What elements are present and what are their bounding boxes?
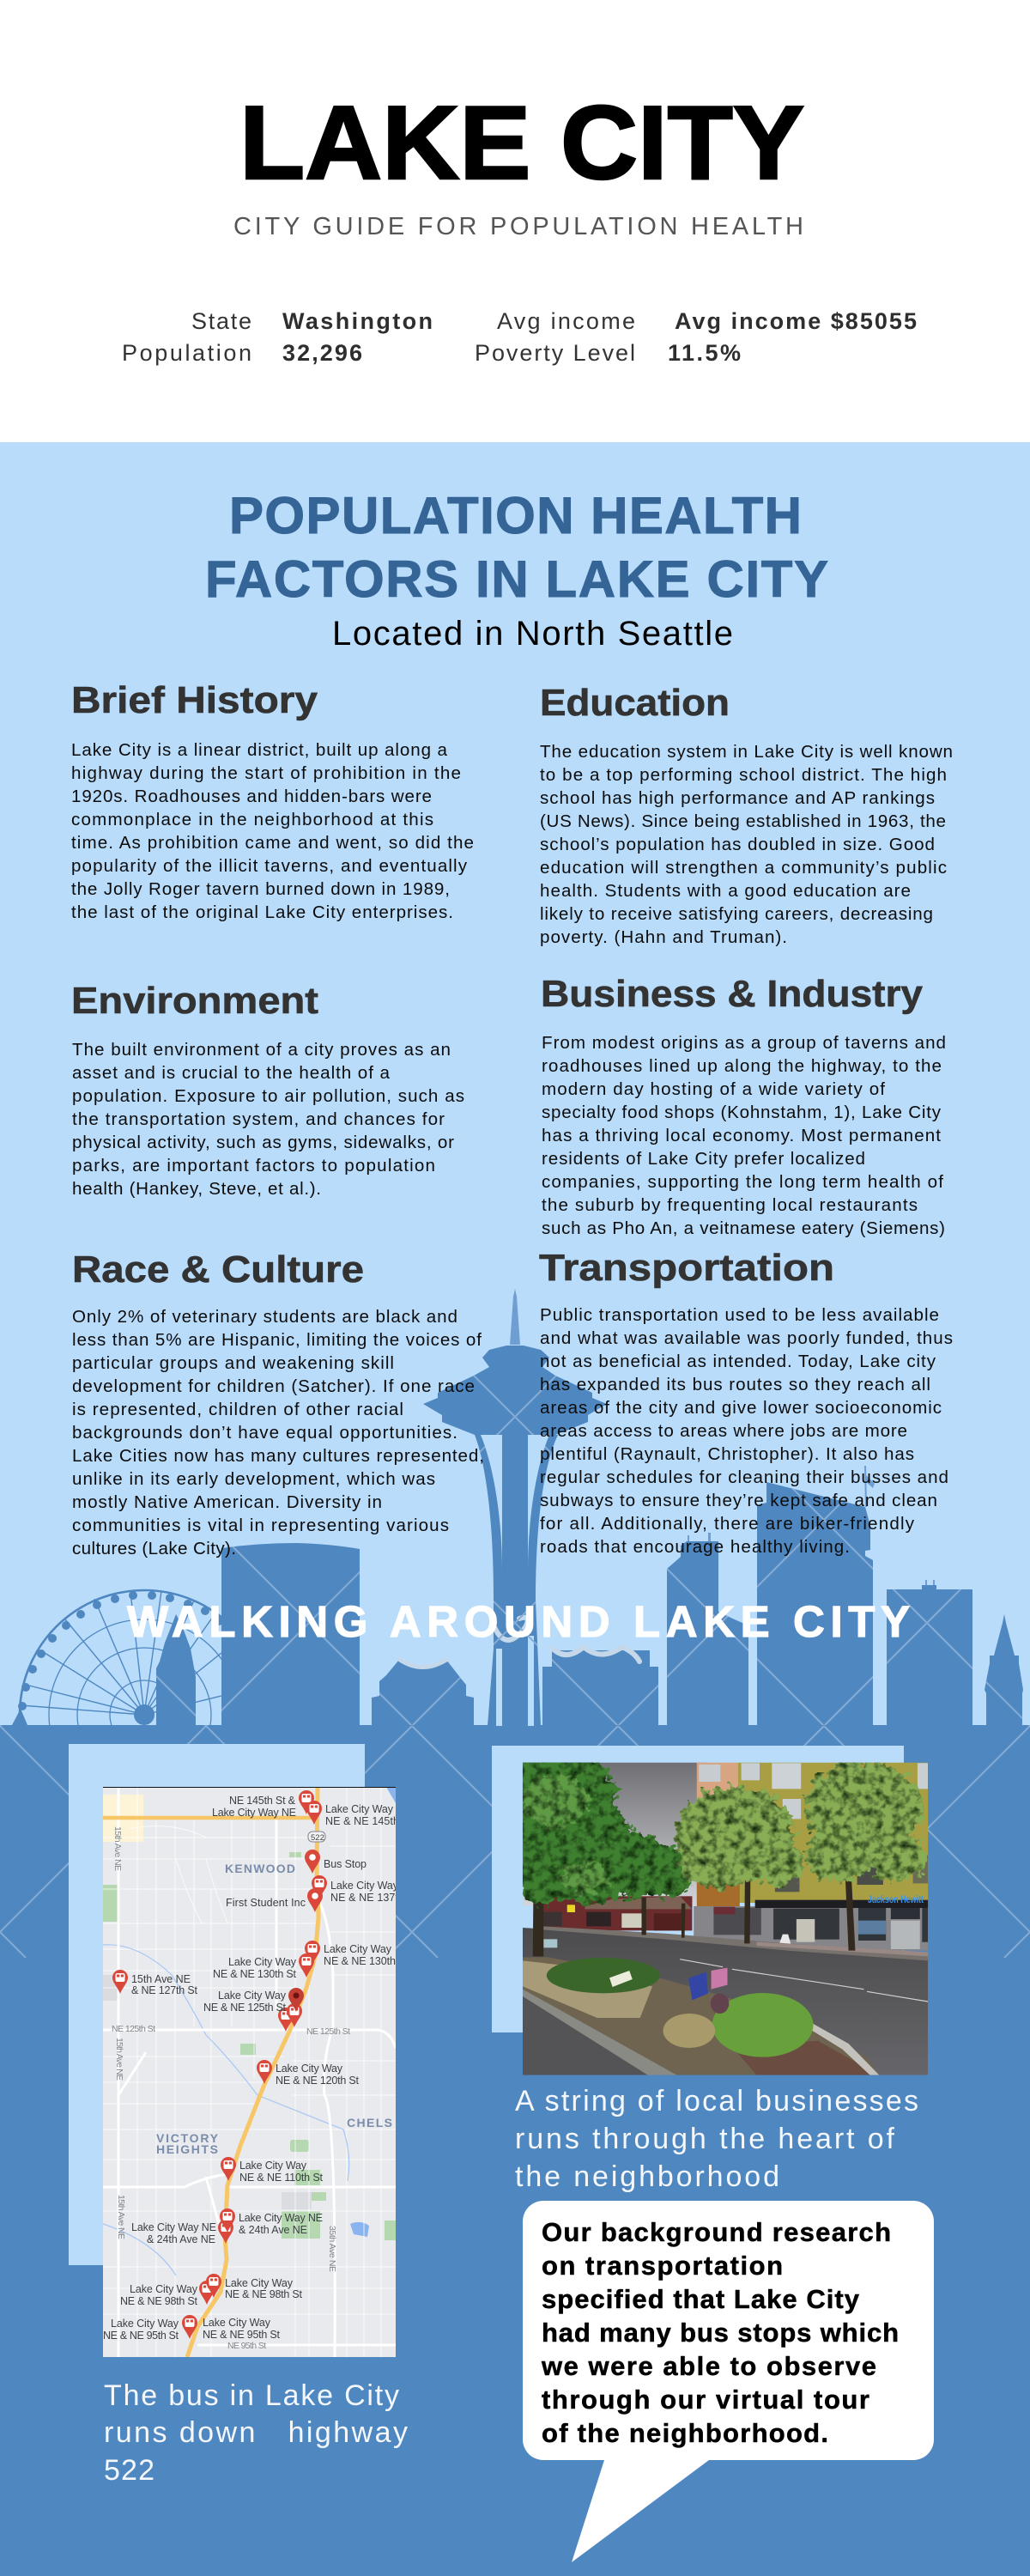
subtitle: CITY GUIDE FOR POPULATION HEALTH xyxy=(233,213,803,240)
bubble text: specified that Lake City xyxy=(542,2284,860,2314)
map grid streets xyxy=(103,1787,396,2357)
city statistics: State xyxy=(191,308,251,334)
caption: local businesses: A string of local businesses xyxy=(515,2085,918,2117)
block: environment: asset and is crucial to the health of a xyxy=(72,1063,391,1083)
tree foliage xyxy=(522,1762,928,1909)
block: brief history: Lake City is a linear district, built up along a xyxy=(71,740,448,760)
bus stop labels: NE & NE 130th St xyxy=(213,1968,297,1980)
diagonal lattice pattern xyxy=(0,1376,1030,1958)
light backing panel: photo xyxy=(492,1746,904,2032)
block: environment: Environment xyxy=(71,980,318,1022)
map street labels: NE 95th St xyxy=(227,2341,266,2351)
route shield: 522 xyxy=(311,1833,324,1843)
block: transportation: and what was available was poorly funded, thus xyxy=(540,1328,953,1348)
block: race and culture: mostly Native American. Diversity in xyxy=(72,1492,382,1512)
bus stop labels: Lake City Way xyxy=(218,1990,287,2002)
bus stop labels: NE 145th St & xyxy=(229,1795,296,1807)
block: brief history: popularity of the illicit taverns, and eventually xyxy=(71,856,468,876)
block: education: education will strengthen a community’s public xyxy=(540,858,947,878)
bubble text: Our background research xyxy=(542,2217,891,2247)
bus stop labels: NE & NE 98th St xyxy=(225,2288,303,2300)
section heading: POPULATION HEALTH xyxy=(229,487,802,544)
block: transportation: roads that encourage healthy living. xyxy=(540,1537,850,1557)
city statistics xyxy=(122,308,917,366)
block: environment xyxy=(71,980,464,1199)
map street labels: NE 125th St xyxy=(112,2024,155,2034)
block: transportation: regular schedules for cleaning their busses and xyxy=(540,1467,948,1487)
apartment building xyxy=(697,1763,928,1906)
bus stop labels: Lake City Way xyxy=(130,2283,198,2295)
caption: bus map: The bus in Lake City xyxy=(104,2379,399,2412)
bubble text: on transportation xyxy=(542,2251,783,2281)
block: transportation: subways to ensure they’re kept safe and clean xyxy=(540,1491,937,1510)
route shield xyxy=(308,1832,325,1843)
block: brief history: the Jolly Roger tavern burned down in 1989, xyxy=(71,879,450,899)
bus stop labels: Lake City Way xyxy=(325,1803,394,1815)
block: business and industry: companies, supporting the long term health of xyxy=(542,1172,943,1192)
map street labels: 15th Ave NE xyxy=(114,2038,124,2081)
block: business and industry: has a thriving local economy. Most permanent xyxy=(542,1126,941,1145)
map street labels: NE 125th St xyxy=(306,2026,350,2037)
block: transportation: Public transportation used to be less available xyxy=(540,1305,939,1325)
map neighborhood labels: VICTORY xyxy=(156,2131,219,2145)
block: education: school’s population has doubled in size. Good xyxy=(540,835,935,854)
block: race and culture: Only 2% of veterinary students are black and xyxy=(72,1307,457,1327)
block: race and culture: cultures (Lake City). xyxy=(72,1539,236,1558)
city statistics: Washington xyxy=(282,308,433,334)
map neighborhood labels xyxy=(156,1862,392,2156)
caption: local businesses xyxy=(515,2085,918,2193)
bus stop labels: NE & NE 130th xyxy=(324,1955,396,1967)
block: education: likely to receive satisfying careers, decreasing xyxy=(540,904,933,924)
light blue panel background xyxy=(0,442,1030,1730)
caption: local businesses: the neighborhood xyxy=(515,2160,779,2193)
curb xyxy=(523,1990,677,2075)
sky xyxy=(523,1763,706,1905)
map top edge xyxy=(103,1787,396,1788)
lower left road xyxy=(523,1996,648,2075)
bus stop labels: NE & NE 137th xyxy=(330,1892,404,1904)
block: race and culture: less than 5% are Hispanic, limiting the voices of xyxy=(72,1330,482,1350)
block: race and culture: development for children (Satcher). If one race xyxy=(72,1376,475,1396)
bus stop labels: & 24th Ave NE xyxy=(147,2233,215,2245)
block: brief history: Brief History xyxy=(71,679,318,721)
bus stop labels: Lake City Way xyxy=(225,2277,294,2289)
map neighborhood labels: HEIGHTS xyxy=(156,2142,218,2156)
section heading xyxy=(205,487,828,608)
block: environment: The built environment of a city proves as an xyxy=(72,1040,451,1060)
rooftop details xyxy=(688,1466,935,1585)
bubble text: we were able to observe xyxy=(541,2351,876,2381)
bus stop labels: 15th Ave NE xyxy=(131,1973,191,1985)
bus stop labels: Lake City Way NE xyxy=(131,2221,216,2233)
bus stop labels: Lake City Way xyxy=(203,2317,271,2329)
block: transportation: plentiful (Raynault, Christopher). It also has xyxy=(540,1444,914,1464)
block: education: poverty. (Hahn and Truman). xyxy=(540,927,787,947)
shrub and grass xyxy=(547,1958,813,2057)
median xyxy=(523,1957,879,2075)
block: brief history: time. As prohibition came and went, so did the xyxy=(71,833,474,853)
seattle skyline silhouette xyxy=(0,1288,1030,1958)
block: race and culture: Lake Cities now has many cultures represented, xyxy=(72,1446,484,1466)
bus stop labels: NE & NE 98th St xyxy=(120,2295,198,2307)
bus stop labels: NE & NE 95th St xyxy=(103,2330,179,2342)
block: race and culture: communities is vital in representing various xyxy=(72,1516,449,1535)
bus stop labels: Lake City Way NE xyxy=(239,2212,323,2224)
caption: bus map: 522 xyxy=(104,2454,154,2487)
bus route map xyxy=(103,1786,404,2357)
street view photo of lake city way xyxy=(498,1750,928,2075)
bus stop labels: NE & NE 110th St xyxy=(239,2172,324,2184)
block: business and industry: residents of Lake City prefer localized xyxy=(542,1149,865,1169)
map base xyxy=(103,1787,396,2357)
road xyxy=(523,1928,928,2075)
bus stop labels: Lake City Way NE xyxy=(212,1807,296,1819)
bus stop pins xyxy=(112,1790,327,2339)
map street labels xyxy=(112,1826,350,2351)
block: business and industry: modern day hosting of a wide variety of xyxy=(542,1079,885,1099)
block: education: health. Students with a good education are xyxy=(540,881,911,901)
bus stop labels: Lake City Way xyxy=(228,1956,297,1968)
map street labels: 35th Ave NE xyxy=(327,2226,337,2272)
bubble text xyxy=(541,2217,899,2448)
block: race and culture: unlike in its early development, which was xyxy=(72,1469,435,1489)
block: environment: health (Hankey, Steve, et al.). xyxy=(72,1179,321,1199)
ferris wheel gondolas xyxy=(18,1591,223,1725)
sidewalk xyxy=(542,1926,928,1960)
city statistics: Avg income xyxy=(497,308,635,334)
block: transportation: has expanded its bus routes so they reach all xyxy=(540,1375,930,1394)
block: environment: population. Exposure to air pollution, such as xyxy=(72,1086,464,1106)
bus stop labels: & NE 127th St xyxy=(131,1984,198,1996)
space needle base light strips xyxy=(496,1636,534,1726)
block: environment: physical activity, such as gyms, sidewalks, or xyxy=(72,1133,454,1152)
bus stop labels: Lake City Way xyxy=(239,2160,307,2172)
light backing panel: map xyxy=(69,1744,365,2265)
city statistics: Population xyxy=(122,340,251,366)
block: brief history xyxy=(71,679,474,922)
bubble text: of the neighborhood. xyxy=(542,2418,828,2448)
map street labels: 15th Ave NE xyxy=(112,1826,123,1871)
city statistics: 32,296 xyxy=(282,340,362,366)
page background white xyxy=(0,0,1030,442)
major streets xyxy=(103,1787,396,2357)
block: business and industry: roadhouses lined up along the highway, to the xyxy=(542,1056,942,1076)
bus stop labels: Bus Stop xyxy=(324,1858,367,1870)
highway 522 xyxy=(103,1787,318,2357)
block: business and industry xyxy=(541,973,946,1238)
bus stop labels: NE & NE 95th St xyxy=(203,2329,281,2341)
block: education: school has high performance and AP rankings xyxy=(540,788,935,808)
title: LAKE CITY xyxy=(239,84,804,201)
city statistics: 11.5% xyxy=(668,340,741,366)
map neighborhood labels: CHELS xyxy=(347,2116,392,2129)
buildings and space needle xyxy=(156,1346,1023,1726)
ferris wheel cover below ground xyxy=(0,1725,360,1742)
bus stop labels: & 24th Ave NE xyxy=(239,2224,307,2236)
block: brief history: the last of the original Lake City enterprises. xyxy=(71,902,453,922)
storefronts xyxy=(694,1900,928,1951)
bus stop labels: NE & NE 125th St xyxy=(203,2002,287,2014)
bubble text: through our virtual tour xyxy=(542,2385,869,2415)
block: business and industry: Business & Industry xyxy=(541,973,924,1015)
map neighborhood labels: KENWOOD xyxy=(225,1862,295,1875)
block: brief history: highway during the start of prohibition in the xyxy=(71,763,461,783)
block: transportation xyxy=(539,1247,953,1557)
block: education: to be a top performing school district. The high xyxy=(540,765,947,785)
block: transportation: areas access to areas where jobs are more xyxy=(540,1421,907,1441)
dark blue lower panel background xyxy=(0,1725,1030,2576)
block: business and industry: From modest origins as a group of taverns and xyxy=(542,1033,946,1053)
tree trunks xyxy=(533,1880,855,1956)
bus stop labels: Lake City Way xyxy=(330,1880,399,1892)
block: brief history: 1920s. Roadhouses and hidden-bars were xyxy=(71,787,432,806)
block: race and culture: is represented, children of other racial xyxy=(72,1400,403,1419)
map street labels: 15th Ave NE xyxy=(116,2195,126,2239)
lane markings xyxy=(680,1959,928,2002)
block: transportation: not as beneficial as intended. Today, Lake city xyxy=(540,1352,936,1371)
bubble shape xyxy=(523,2201,934,2562)
block: environment: parks, are important factors to population xyxy=(72,1156,435,1176)
photo sign text: Jackson Hewitt xyxy=(868,1893,924,1905)
city statistics: Avg income $85055 xyxy=(675,308,917,334)
pale clouds script xyxy=(400,1618,639,1668)
block: transportation: Transportation xyxy=(539,1247,834,1289)
block: business and industry: specialty food shops (Kohnstahm, 1), Lake City xyxy=(542,1103,942,1122)
block: transportation: areas of the city and give lower socioeconomic xyxy=(540,1398,942,1418)
walking around heading: WALKING AROUND LAKE CITY xyxy=(127,1597,910,1646)
block: education xyxy=(540,682,953,947)
bus stop labels: Lake City Way xyxy=(324,1943,392,1955)
bubble text: had many bus stops which xyxy=(542,2318,899,2348)
section heading: FACTORS IN LAKE CITY xyxy=(205,550,828,608)
caption: local businesses: runs through the heart of xyxy=(515,2123,895,2155)
bus stop labels xyxy=(103,1795,404,2342)
block: brief history: commonplace in the neighborhood at this xyxy=(71,810,433,829)
block: education: The education system in Lake City is well known xyxy=(540,742,953,762)
caption: bus map xyxy=(104,2379,408,2487)
block: transportation: for all. Additionally, there are biker-friendly xyxy=(540,1514,915,1534)
yard signs xyxy=(543,1905,727,2000)
creeks xyxy=(103,1945,349,2275)
bus stop labels: First Student Inc xyxy=(226,1897,306,1909)
city statistics: Poverty Level xyxy=(475,340,635,366)
block: race and culture xyxy=(72,1249,484,1558)
block: education: (US News). Since being established in 1963, the xyxy=(540,811,946,831)
red low shops xyxy=(542,1896,692,1930)
bus stop labels: NE & NE 120th St xyxy=(276,2075,360,2087)
caption: bus map: runs down highway xyxy=(104,2416,408,2449)
block: business and industry: the suburb by frequenting local restaurants xyxy=(542,1195,918,1215)
block: race and culture: particular groups and weakening skill xyxy=(72,1353,394,1373)
ferris wheel support foot xyxy=(12,1709,27,1725)
map land patches xyxy=(103,1787,396,2240)
speech bubble callout xyxy=(523,2201,934,2562)
block: environment: the transportation system, and chances for xyxy=(72,1109,445,1129)
block: education: Education xyxy=(540,682,730,724)
section subheading: Located in North Seattle xyxy=(332,615,733,653)
bus stop labels: Lake City Way xyxy=(276,2063,343,2075)
bus stop labels: Lake City Way xyxy=(111,2318,179,2330)
bus stop labels: NE & NE 145th xyxy=(325,1815,399,1827)
block: race and culture: Race & Culture xyxy=(72,1249,364,1291)
block: race and culture: backgrounds don’t have equal opportunities. xyxy=(72,1423,457,1443)
antenna of space needle xyxy=(510,1289,520,1345)
block: business and industry: such as Pho An, a veitnamese eatery (Siemens) xyxy=(542,1218,945,1238)
ferris wheel xyxy=(20,1590,269,1839)
